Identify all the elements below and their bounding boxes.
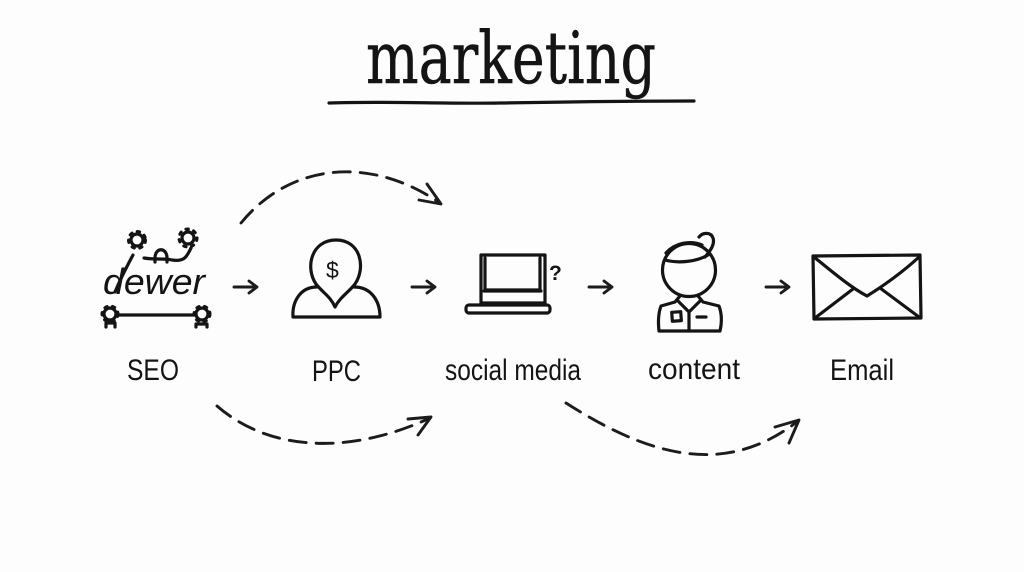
label: PPC: PPC — [312, 355, 361, 388]
arrow: content to Email — [766, 281, 789, 293]
icon: laptop with question mark: ? — [549, 262, 562, 285]
icon: envelope — [813, 255, 921, 319]
arrow: PPC to social media — [412, 281, 435, 293]
dashed arrow: SEO to social media — [241, 172, 441, 223]
icon: PPC person with dollar pin — [293, 240, 380, 317]
icon: SEO network — [102, 229, 210, 327]
dashed arrow: social media to Email — [566, 403, 799, 455]
label: SEO: SEO — [127, 354, 179, 387]
label: content: content — [648, 353, 741, 386]
icon: SEO network: dewer — [103, 261, 207, 302]
icon: person with curl — [658, 233, 721, 331]
label: social media: social media — [445, 354, 581, 387]
label: Email: Email — [830, 354, 894, 387]
dashed arrow: SEO to social media lower — [217, 406, 431, 443]
icon: PPC person with dollar pin: $ — [326, 257, 339, 283]
arrow: social media to content — [589, 281, 612, 293]
arrow: SEO to PPC — [234, 281, 257, 293]
icon: laptop with question mark — [466, 255, 562, 313]
title: marketing — [366, 16, 656, 100]
